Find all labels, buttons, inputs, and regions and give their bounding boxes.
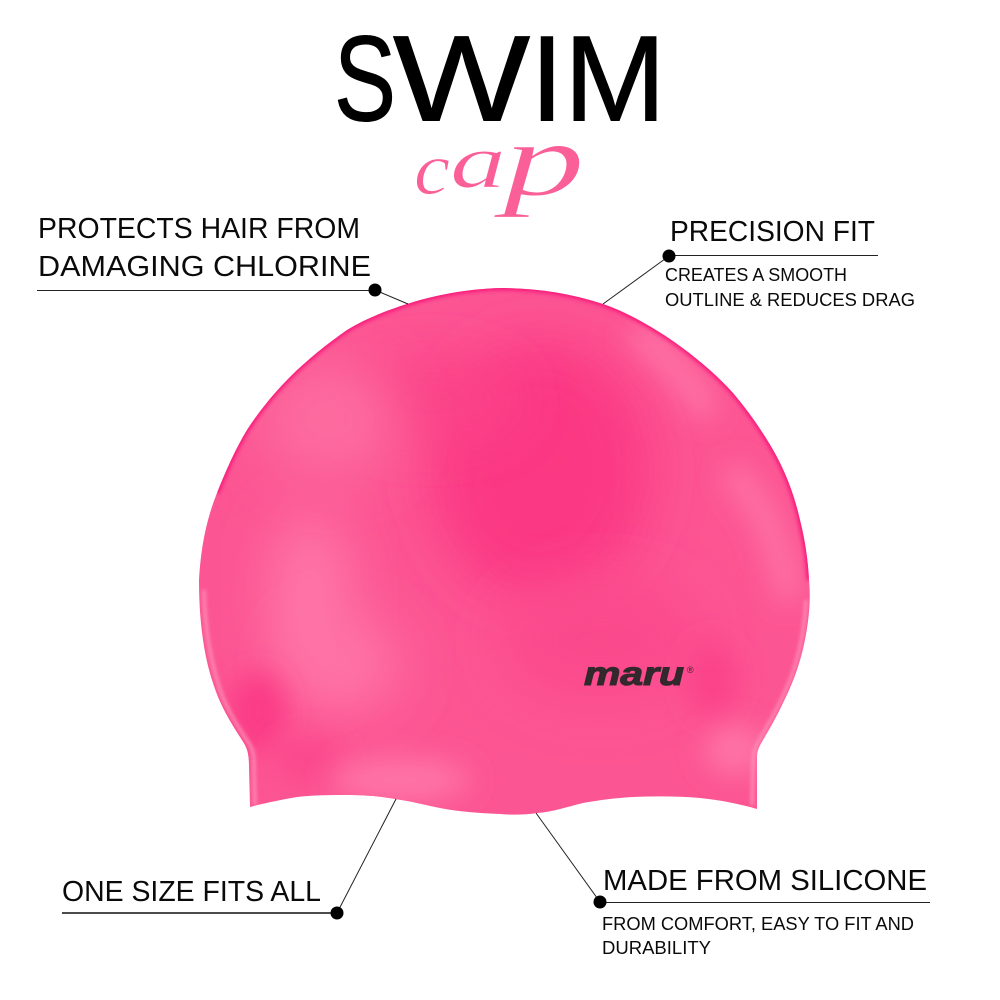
logo: maru: ® xyxy=(687,665,694,675)
callout: made from silicone: MADE FROM SILICONE xyxy=(603,865,927,897)
callout: protects hair xyxy=(37,213,408,304)
callout: protects hair: DAMAGING CHLORINE xyxy=(38,251,371,283)
title: SWIM xyxy=(334,10,666,146)
title: SWIM: I xyxy=(530,10,564,146)
callout: precision fit: CREATES A SMOOTH xyxy=(665,265,847,285)
callout: made from silicone xyxy=(536,813,930,958)
subtitle: cap xyxy=(414,101,585,218)
callout: one size fits all: ONE SIZE FITS ALL xyxy=(62,876,321,908)
subtitle: cap: a xyxy=(450,120,506,204)
title: SWIM: M xyxy=(564,10,666,146)
subtitle: cap: p xyxy=(492,101,585,218)
callout: precision fit: PRECISION FIT xyxy=(670,216,875,248)
callout: one size fits all xyxy=(62,799,396,920)
subtitle: cap: c xyxy=(414,129,450,211)
title: SWIM: W xyxy=(393,10,530,146)
logo: maru: maru xyxy=(584,655,684,692)
callout: precision fit xyxy=(603,216,915,310)
callout: precision fit: OUTLINE & REDUCES DRAG xyxy=(665,290,915,310)
callout: made from silicone: DURABILITY xyxy=(602,938,711,958)
callout: made from silicone: FROM COMFORT, EASY TO FIT AND xyxy=(602,914,914,934)
swim cap illustration xyxy=(199,288,810,815)
callout: protects hair: PROTECTS HAIR FROM xyxy=(38,213,360,245)
title: SWIM: S xyxy=(334,10,396,146)
